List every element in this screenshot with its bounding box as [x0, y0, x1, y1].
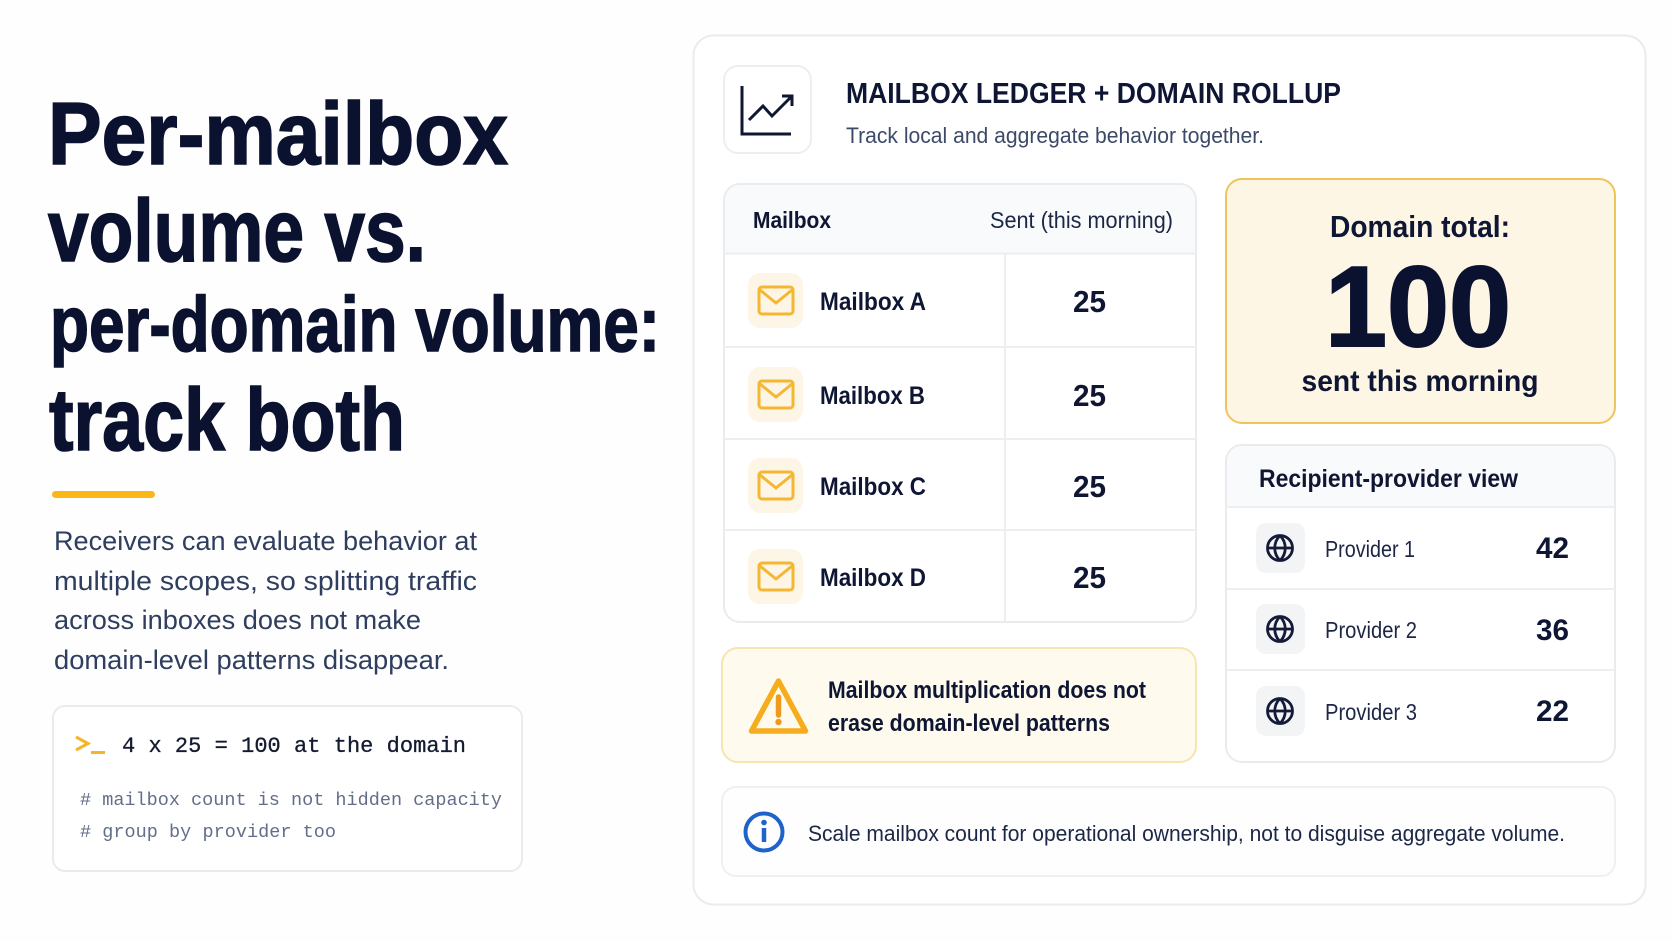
- warning text: erase domain-level patterns: [828, 710, 1110, 737]
- description paragraph: [54, 526, 477, 675]
- accent underline: [52, 491, 155, 498]
- row: Mailbox D: [748, 549, 1106, 604]
- row: Provider 3: Provider 3: [1325, 699, 1417, 725]
- warning text: Mailbox multiplication does not: [828, 677, 1146, 704]
- code formula: 4 x 25 = 100 at the domain: [122, 734, 466, 759]
- domain total number: 100: [1325, 244, 1511, 371]
- row: Mailbox A: 25: [1073, 284, 1106, 319]
- code snippet card: [53, 706, 522, 871]
- row: Mailbox C: 25: [1073, 469, 1106, 504]
- panel: mailbox ledger and domain rollup: [694, 36, 1646, 904]
- row: Mailbox B: Mailbox B: [820, 382, 925, 410]
- icon: line chart: [724, 66, 811, 153]
- row: Provider 2: 36: [1536, 614, 1569, 647]
- description paragraph: Receivers can evaluate behavior at: [54, 526, 477, 556]
- title: Per-mailbox: [48, 84, 508, 183]
- domain total card: [1226, 179, 1615, 423]
- row: Mailbox B: [748, 367, 1106, 422]
- info text: Scale mailbox count for operational ownership, not to disguise aggregate volume.: [808, 821, 1565, 846]
- row: Provider 2: [1256, 604, 1569, 654]
- title: track both: [49, 370, 405, 469]
- title: [48, 84, 660, 469]
- warning text: [828, 677, 1146, 737]
- domain total label: Domain total:: [1330, 209, 1510, 244]
- row: Provider 2: Provider 2: [1325, 617, 1417, 643]
- row: Mailbox A: [748, 273, 1106, 328]
- row: Provider 1: Provider 1: [1325, 536, 1415, 562]
- panel heading: MAILBOX LEDGER + DOMAIN ROLLUP: [846, 78, 1341, 110]
- mailbox table: [724, 184, 1196, 622]
- provider card header: [1227, 446, 1614, 507]
- row: Mailbox D: Mailbox D: [820, 564, 926, 592]
- domain total caption: sent this morning: [1302, 365, 1538, 398]
- row: Provider 1: 42: [1536, 532, 1569, 565]
- title: volume vs.: [48, 181, 426, 280]
- row: Mailbox A: Mailbox A: [820, 288, 926, 316]
- code comments: # mailbox count is not hidden capacity: [80, 790, 502, 811]
- table header: Mailbox: [753, 207, 831, 233]
- title: per-domain volume:: [50, 280, 660, 368]
- provider card header: Recipient-provider view: [1259, 465, 1518, 493]
- row: Mailbox C: Mailbox C: [820, 473, 926, 501]
- code comments: # group by provider too: [80, 822, 336, 843]
- description paragraph: multiple scopes, so splitting traffic: [54, 566, 477, 596]
- warning callout: [722, 648, 1196, 762]
- description paragraph: domain-level patterns disappear.: [54, 645, 449, 675]
- description paragraph: across inboxes does not make: [54, 605, 421, 635]
- row: Mailbox C: [748, 458, 1106, 513]
- row: Provider 3: 22: [1536, 695, 1569, 728]
- code comments: [80, 790, 502, 843]
- panel header: [724, 66, 1341, 153]
- row: Mailbox B: 25: [1073, 378, 1106, 413]
- row: Provider 3: [1256, 686, 1569, 736]
- icon: terminal prompt: [76, 737, 105, 752]
- row: Provider 1: [1256, 523, 1569, 573]
- panel subheading: Track local and aggregate behavior together.: [846, 123, 1264, 148]
- recipient provider card: [1226, 445, 1615, 762]
- info callout: [722, 787, 1615, 876]
- table header: Sent (this morning): [990, 207, 1173, 233]
- left column: title and explanation: [48, 84, 660, 871]
- row: Mailbox D: 25: [1073, 560, 1106, 595]
- icon: warning triangle: [752, 681, 806, 731]
- icon: info: [746, 814, 782, 850]
- table header: [725, 185, 1195, 253]
